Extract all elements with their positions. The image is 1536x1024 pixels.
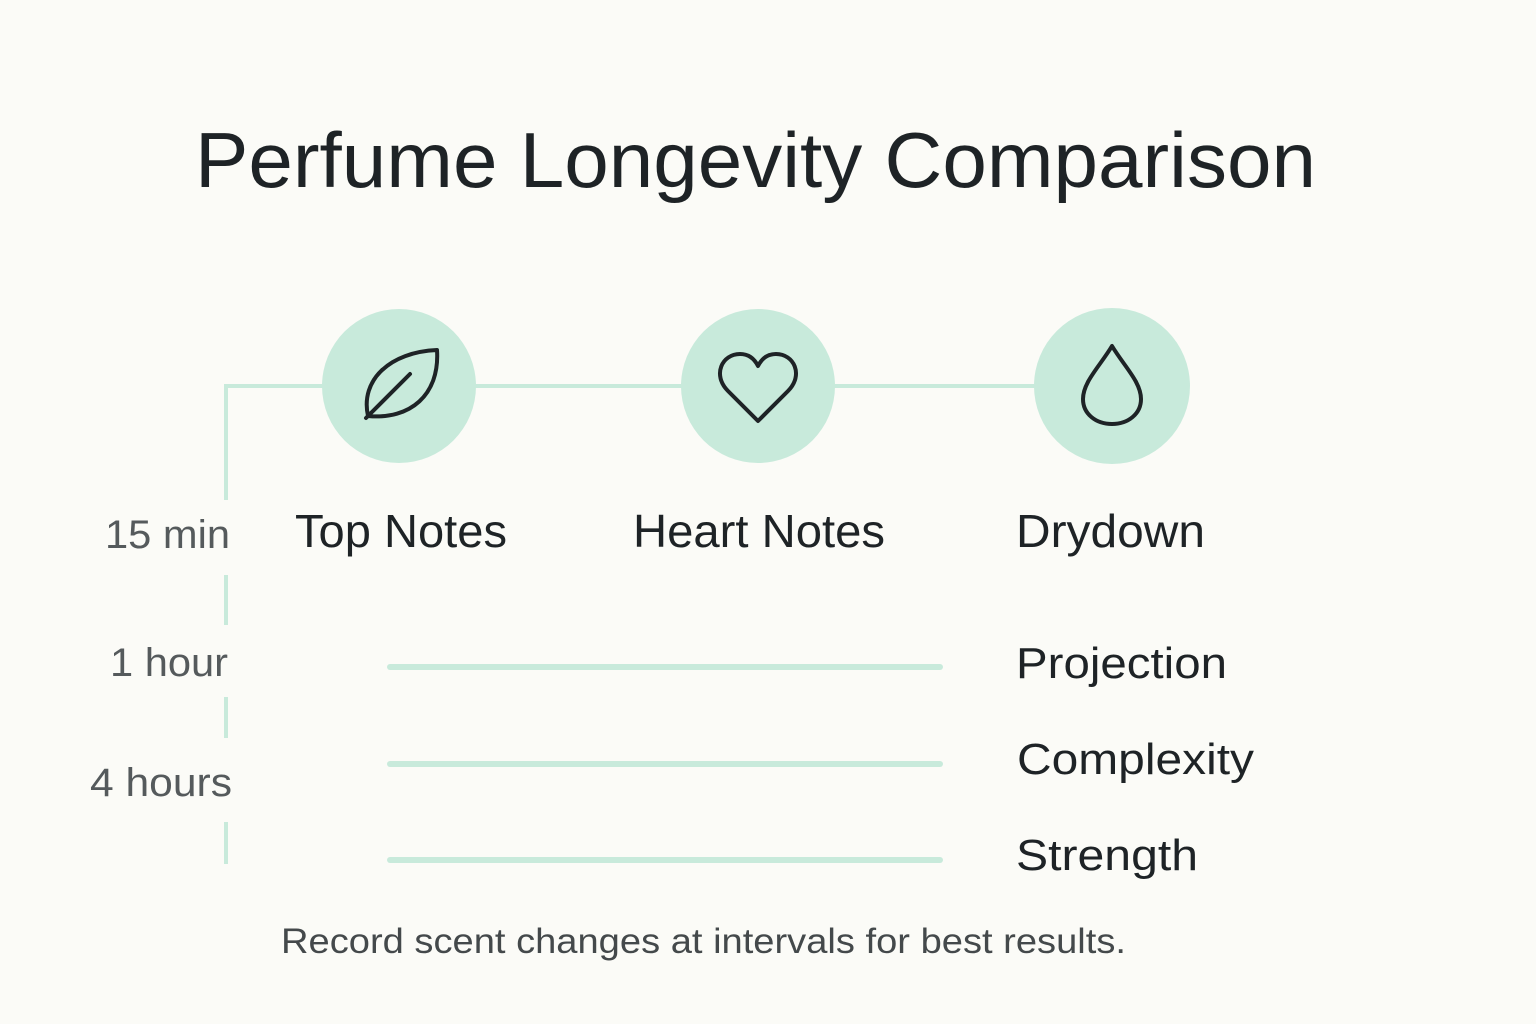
metric labels: [1016, 639, 1254, 880]
icon: heart (Heart Notes): [681, 309, 835, 463]
footer note: Record scent changes at intervals for best results.: [281, 922, 1126, 961]
metric labels: Projection: [1016, 639, 1227, 688]
time labels: 15 min: [105, 513, 230, 557]
metric labels: Complexity: [1017, 735, 1254, 784]
metric labels: Strength: [1016, 831, 1198, 880]
time labels: 4 hours: [90, 761, 232, 805]
time labels: [90, 513, 232, 805]
timeline connector: [226, 386, 1040, 864]
icon: leaf (Top Notes): [322, 309, 476, 463]
stage labels: [295, 505, 1205, 557]
icon: drop (Drydown): [1034, 308, 1190, 464]
metric bars: [390, 667, 940, 860]
stage labels: Heart Notes: [633, 505, 885, 557]
stage labels: Drydown: [1016, 505, 1205, 557]
title: Perfume Longevity Comparison: [195, 116, 1316, 204]
stage labels: Top Notes: [295, 505, 507, 557]
time labels: 1 hour: [110, 641, 228, 685]
